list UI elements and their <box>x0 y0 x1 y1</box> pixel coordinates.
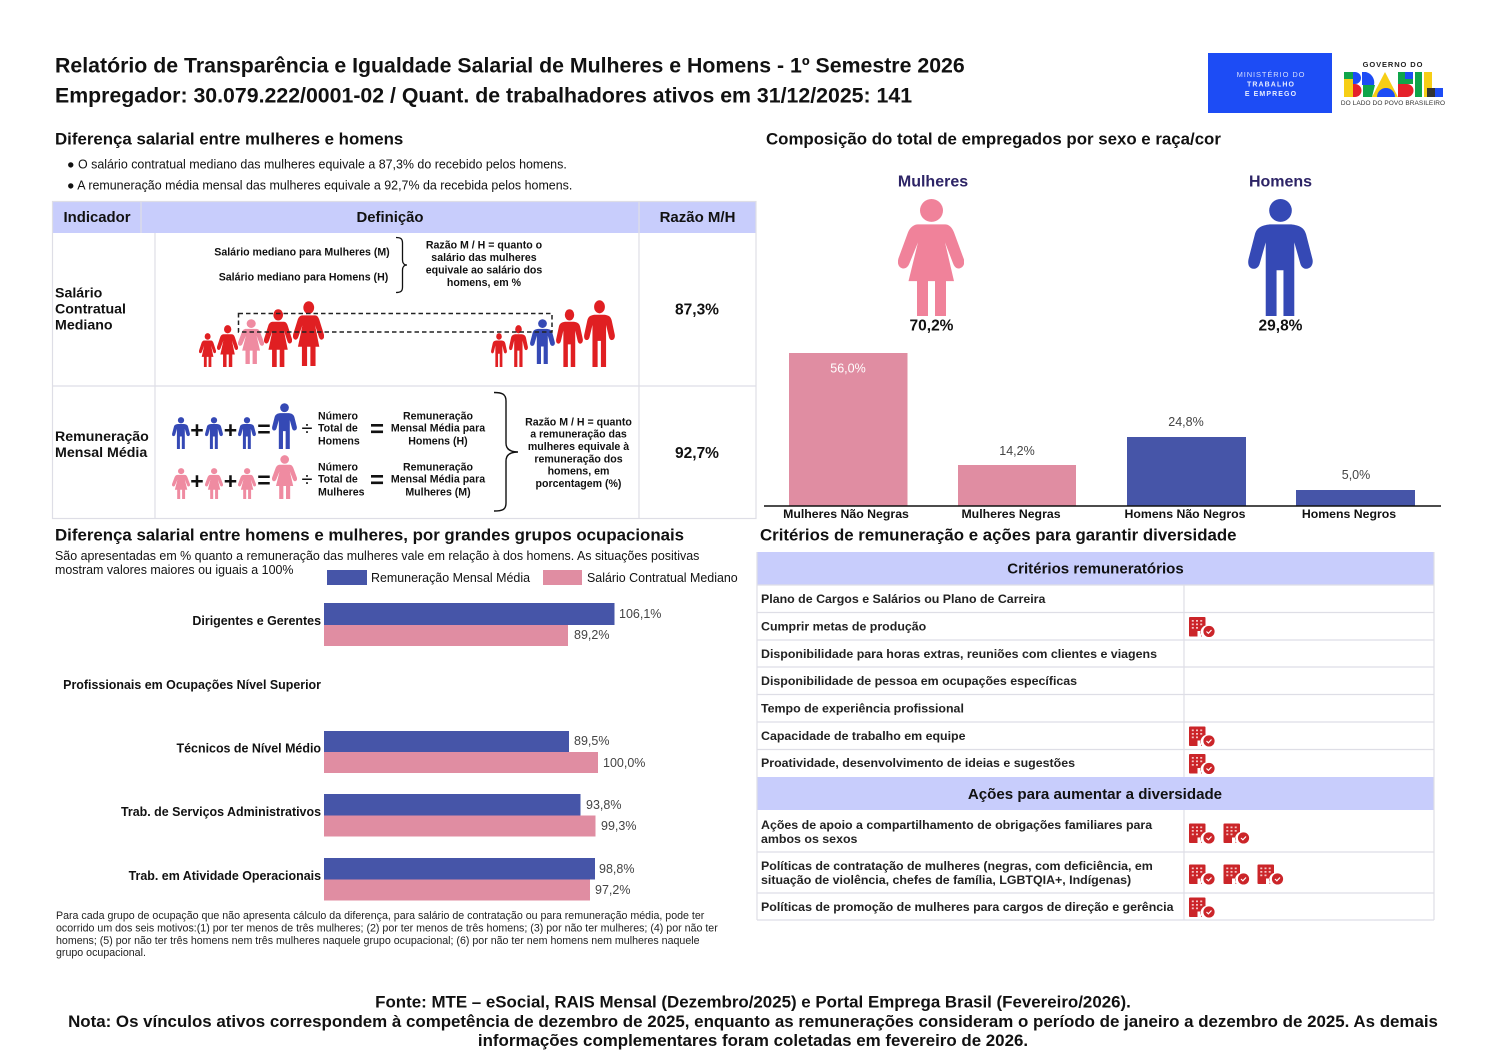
formula: salário mediano: Salário mediano para Homens (H) <box>219 272 388 284</box>
formula: remuneração média homens: = <box>257 416 271 442</box>
group: serviços administrativos: Trab. de Serviços Administrativos <box>121 805 321 819</box>
dashed median box <box>238 314 552 332</box>
formula: remuneração média mulheres: Mensal Média para <box>391 474 485 486</box>
bar chart: grupos ocupacionais <box>63 603 661 900</box>
column chart: sexo e raça/cor <box>764 353 1441 521</box>
column chart: sexo e raça/cor: 14,2% <box>999 444 1035 458</box>
table header: Razão M/H <box>660 209 735 226</box>
table: critérios e ações: Capacidade de trabalho em equipe <box>761 729 966 743</box>
heading: critérios: Critérios de remuneração e ações para garantir diversidade <box>760 526 1237 544</box>
table: critérios e ações: Disponibilidade para horas extras, reuniões com clientes e viagens <box>761 647 1157 661</box>
brace and ratio explanation: Razão M / H = quanto <box>525 416 632 428</box>
source note: informações complementares foram coletadas em fevereiro de 2026. <box>478 1031 1028 1050</box>
formula: remuneração média mulheres: ÷ <box>302 469 313 491</box>
bullet points <box>67 158 572 192</box>
brace and ratio explanation: a remuneração das <box>530 428 627 440</box>
footnote <box>56 910 718 959</box>
row: remuneração mensal média: 92,7% <box>675 445 719 462</box>
formula: remuneração média homens: Número <box>318 410 359 422</box>
pictogram: mulheres 70,2%: Mulheres <box>898 174 968 190</box>
source note <box>68 992 1438 1050</box>
subtitle text: mostram valores maiores ou iguais a 100% <box>55 563 294 577</box>
formula: salário mediano: Salário mediano para Mulheres (M) <box>214 246 390 258</box>
group: técnicos de nível médio <box>177 731 645 773</box>
formula: remuneração média mulheres: Mulheres <box>318 486 365 498</box>
source note: Nota: Os vínculos ativos correspondem à competência de dezembro de 2025, enquanto as remunerações consideram o período de janeiro a dezembro de 2025. As demais <box>68 1012 1438 1031</box>
table: indicadores de razão <box>52 201 756 518</box>
brace and ratio explanation: mulheres equivale à <box>528 441 629 453</box>
formula: remuneração média homens: Mensal Média para <box>391 422 485 434</box>
table: critérios e ações: situação de violência, chefes de família, LGBTQIA+, Indígenas) <box>761 873 1131 887</box>
footnote: grupo ocupacional. <box>56 947 146 959</box>
icons: empresa com check <box>1189 617 1283 918</box>
footnote: ocorrido um dos seis motivos:(1) por ter menos de três mulheres; (2) por ter menos de três homens; (3) por não ter mulheres; (4) por não ter <box>56 922 718 934</box>
group: atividade operacional: Trab. em Atividade Operacionais <box>129 869 321 883</box>
formula: remuneração média mulheres: Total de <box>318 474 358 486</box>
formula: salário mediano <box>214 238 543 292</box>
formula: salário mediano: salário das mulheres <box>431 252 537 264</box>
bullet points: ● O salário contratual mediano das mulheres equivale a 87,3% do recebido pelos homens. <box>67 158 567 172</box>
table: critérios e ações: Ações de apoio a compartilhamento de obrigações familiares para <box>761 818 1152 832</box>
table header <box>63 209 735 226</box>
formula: remuneração média homens: Total de <box>318 422 358 434</box>
subtitle text <box>55 549 699 577</box>
formula: remuneração média homens <box>172 403 485 449</box>
table: critérios e ações: Ações para aumentar a diversidade <box>968 786 1222 803</box>
formula: remuneração média homens: Homens (H) <box>408 436 468 448</box>
footnote: Para cada grupo de ocupação que não apresenta cálculo da diferença, para salário de contratação ou para remuneração média, pode ter <box>56 910 705 922</box>
logo: Governo do Brasil: GOVERNO DO <box>1363 60 1423 69</box>
brace and ratio explanation <box>494 392 632 511</box>
group: atividade operacional: 97,2% <box>595 883 630 897</box>
footnote: homens; (5) por não ter três homens nem três mulheres naquele grupo ocupacional; (6) por não ter nem homens nem mulheres naquele <box>56 935 700 947</box>
logo: Ministério do Trabalho e Emprego: E EMPREGO <box>1245 91 1297 98</box>
formula: remuneração média mulheres: + <box>190 468 204 494</box>
logo: Governo do Brasil: DO LADO DO POVO BRASILEIRO <box>1341 100 1445 107</box>
formula: salário mediano: equivale ao salário dos <box>426 264 542 276</box>
row: salário contratual mediano: 87,3% <box>675 302 719 318</box>
heading: composição: Composição do total de empregados por sexo e raça/cor <box>766 130 1221 148</box>
source note: Fonte: MTE – eSocial, RAIS Mensal (Dezembro/2025) e Portal Emprega Brasil (Fevereiro/2026). <box>375 992 1131 1012</box>
column chart: sexo e raça/cor: 56,0% <box>830 362 866 376</box>
title: Relatório de Transparência e Igualdade Salarial de Mulheres e Homens - 1º Semestre 2026 <box>55 54 965 78</box>
logo: Governo do Brasil <box>1341 60 1445 107</box>
title: Empregador: 30.079.222/0001-02 / Quant. de trabalhadores ativos em 31/12/2025: 141 <box>55 84 912 108</box>
row: salário contratual mediano <box>55 286 719 334</box>
bullet points: ● A remuneração média mensal das mulheres equivale a 92,7% da recebida pelos homens. <box>67 178 572 192</box>
heading: diferença salarial: Diferença salarial entre mulheres e homens <box>55 130 403 148</box>
icons: mulheres ordenadas por salário <box>199 301 324 367</box>
table: critérios e ações: Disponibilidade de pessoa em ocupações específicas <box>761 674 1077 688</box>
group: dirigentes e gerentes: 89,2% <box>574 628 609 642</box>
brace and ratio explanation: remuneração dos <box>534 454 623 466</box>
group: técnicos de nível médio: Técnicos de Nível Médio <box>177 742 321 756</box>
formula: remuneração média homens: Remuneração <box>403 410 474 422</box>
column chart: sexo e raça/cor: 5,0% <box>1342 468 1370 482</box>
formula: remuneração média mulheres: Número <box>318 462 359 474</box>
group: dirigentes e gerentes: 106,1% <box>619 607 661 621</box>
pictogram: homens 29,8%: Homens <box>1249 174 1312 190</box>
formula: remuneração média homens: + <box>190 417 204 443</box>
table header: Indicador <box>63 210 131 226</box>
column chart: sexo e raça/cor: 24,8% <box>1168 415 1204 429</box>
pictogram: homens 29,8% <box>1248 174 1313 334</box>
group: serviços administrativos: 99,3% <box>601 819 636 833</box>
group: técnicos de nível médio: 100,0% <box>603 756 645 770</box>
table: critérios e ações: Plano de Cargos e Salários ou Plano de Carreira <box>761 592 1046 606</box>
group: dirigentes e gerentes <box>192 603 661 646</box>
table: critérios e ações <box>757 552 1434 920</box>
subtitle text: São apresentadas em % quanto a remuneração das mulheres vale em relação à dos homens. As situações positivas <box>55 549 699 563</box>
formula: remuneração média homens: + <box>224 417 237 443</box>
table header: Definição <box>356 210 424 226</box>
formula: remuneração média mulheres: Mulheres (M) <box>405 486 471 498</box>
pictogram: homens 29,8%: 29,8% <box>1259 318 1303 334</box>
brace and ratio explanation: porcentagem (%) <box>536 478 621 490</box>
group: profissionais nível superior: Profissionais em Ocupações Nível Superior <box>63 678 321 692</box>
group: atividade operacional <box>129 858 634 900</box>
row: salário contratual mediano: Contratual <box>55 302 126 318</box>
legend <box>327 570 738 585</box>
pictogram: mulheres 70,2%: 70,2% <box>910 318 954 334</box>
formula: remuneração média homens: = <box>370 416 384 443</box>
row: remuneração mensal média: Mensal Média <box>55 445 147 461</box>
formula: remuneração média homens: Homens <box>318 436 360 448</box>
formula: salário mediano: Razão M / H = quanto o <box>426 240 543 252</box>
pictogram: mulheres 70,2% <box>898 174 968 334</box>
formula: remuneração média mulheres: = <box>370 467 384 494</box>
brace and ratio explanation: homens, em <box>548 466 609 478</box>
table: critérios e ações: ambos os sexos <box>761 832 858 846</box>
column chart: sexo e raça/cor: Homens Negros <box>1302 507 1396 521</box>
table: critérios e ações: Cumprir metas de produção <box>761 620 927 634</box>
table: critérios e ações: Políticas de contratação de mulheres (negras, com deficiência, em <box>761 859 1153 873</box>
group: técnicos de nível médio: 89,5% <box>574 734 609 748</box>
heading: grupos ocupacionais: Diferença salarial entre homens e mulheres, por grandes grupos ocupacionais <box>55 526 684 544</box>
formula: remuneração média homens: ÷ <box>302 418 313 440</box>
logo: Ministério do Trabalho e Emprego: TRABALHO <box>1247 82 1295 88</box>
logo: Ministério do Trabalho e Emprego <box>1208 53 1332 113</box>
formula: remuneração média mulheres: Remuneração <box>403 462 474 474</box>
icons: homens ordenados por salário <box>491 300 615 367</box>
title <box>55 54 965 108</box>
column chart: sexo e raça/cor: Mulheres Negras <box>961 507 1061 521</box>
group: serviços administrativos: 93,8% <box>586 798 621 812</box>
legend: Salário Contratual Mediano <box>587 571 738 585</box>
row: remuneração mensal média: Remuneração <box>55 429 149 445</box>
formula: remuneração média mulheres <box>172 455 485 499</box>
legend: Remuneração Mensal Média <box>371 571 530 585</box>
table: critérios e ações: Proatividade, desenvolvimento de ideias e sugestões <box>761 756 1075 770</box>
formula: remuneração média mulheres: = <box>257 467 271 493</box>
table: critérios e ações: Critérios remuneratórios <box>1007 560 1184 578</box>
row: salário contratual mediano: Salário <box>55 286 103 302</box>
formula: salário mediano: homens, em % <box>447 277 522 289</box>
group: atividade operacional: 98,8% <box>599 862 634 876</box>
formula: remuneração média mulheres: + <box>224 468 237 494</box>
table: critérios e ações: Tempo de experiência profissional <box>761 702 964 716</box>
row: salário contratual mediano: Mediano <box>55 318 113 334</box>
row: remuneração mensal média <box>55 429 719 462</box>
column chart: sexo e raça/cor: Homens Não Negros <box>1125 507 1246 521</box>
table: critérios e ações: Políticas de promoção de mulheres para cargos de direção e gerência <box>761 900 1174 914</box>
logo: Ministério do Trabalho e Emprego: MINISTÉRIO DO <box>1237 70 1305 79</box>
group: serviços administrativos <box>121 794 636 836</box>
group: dirigentes e gerentes: Dirigentes e Gerentes <box>192 614 321 628</box>
column chart: sexo e raça/cor: Mulheres Não Negras <box>783 507 909 521</box>
